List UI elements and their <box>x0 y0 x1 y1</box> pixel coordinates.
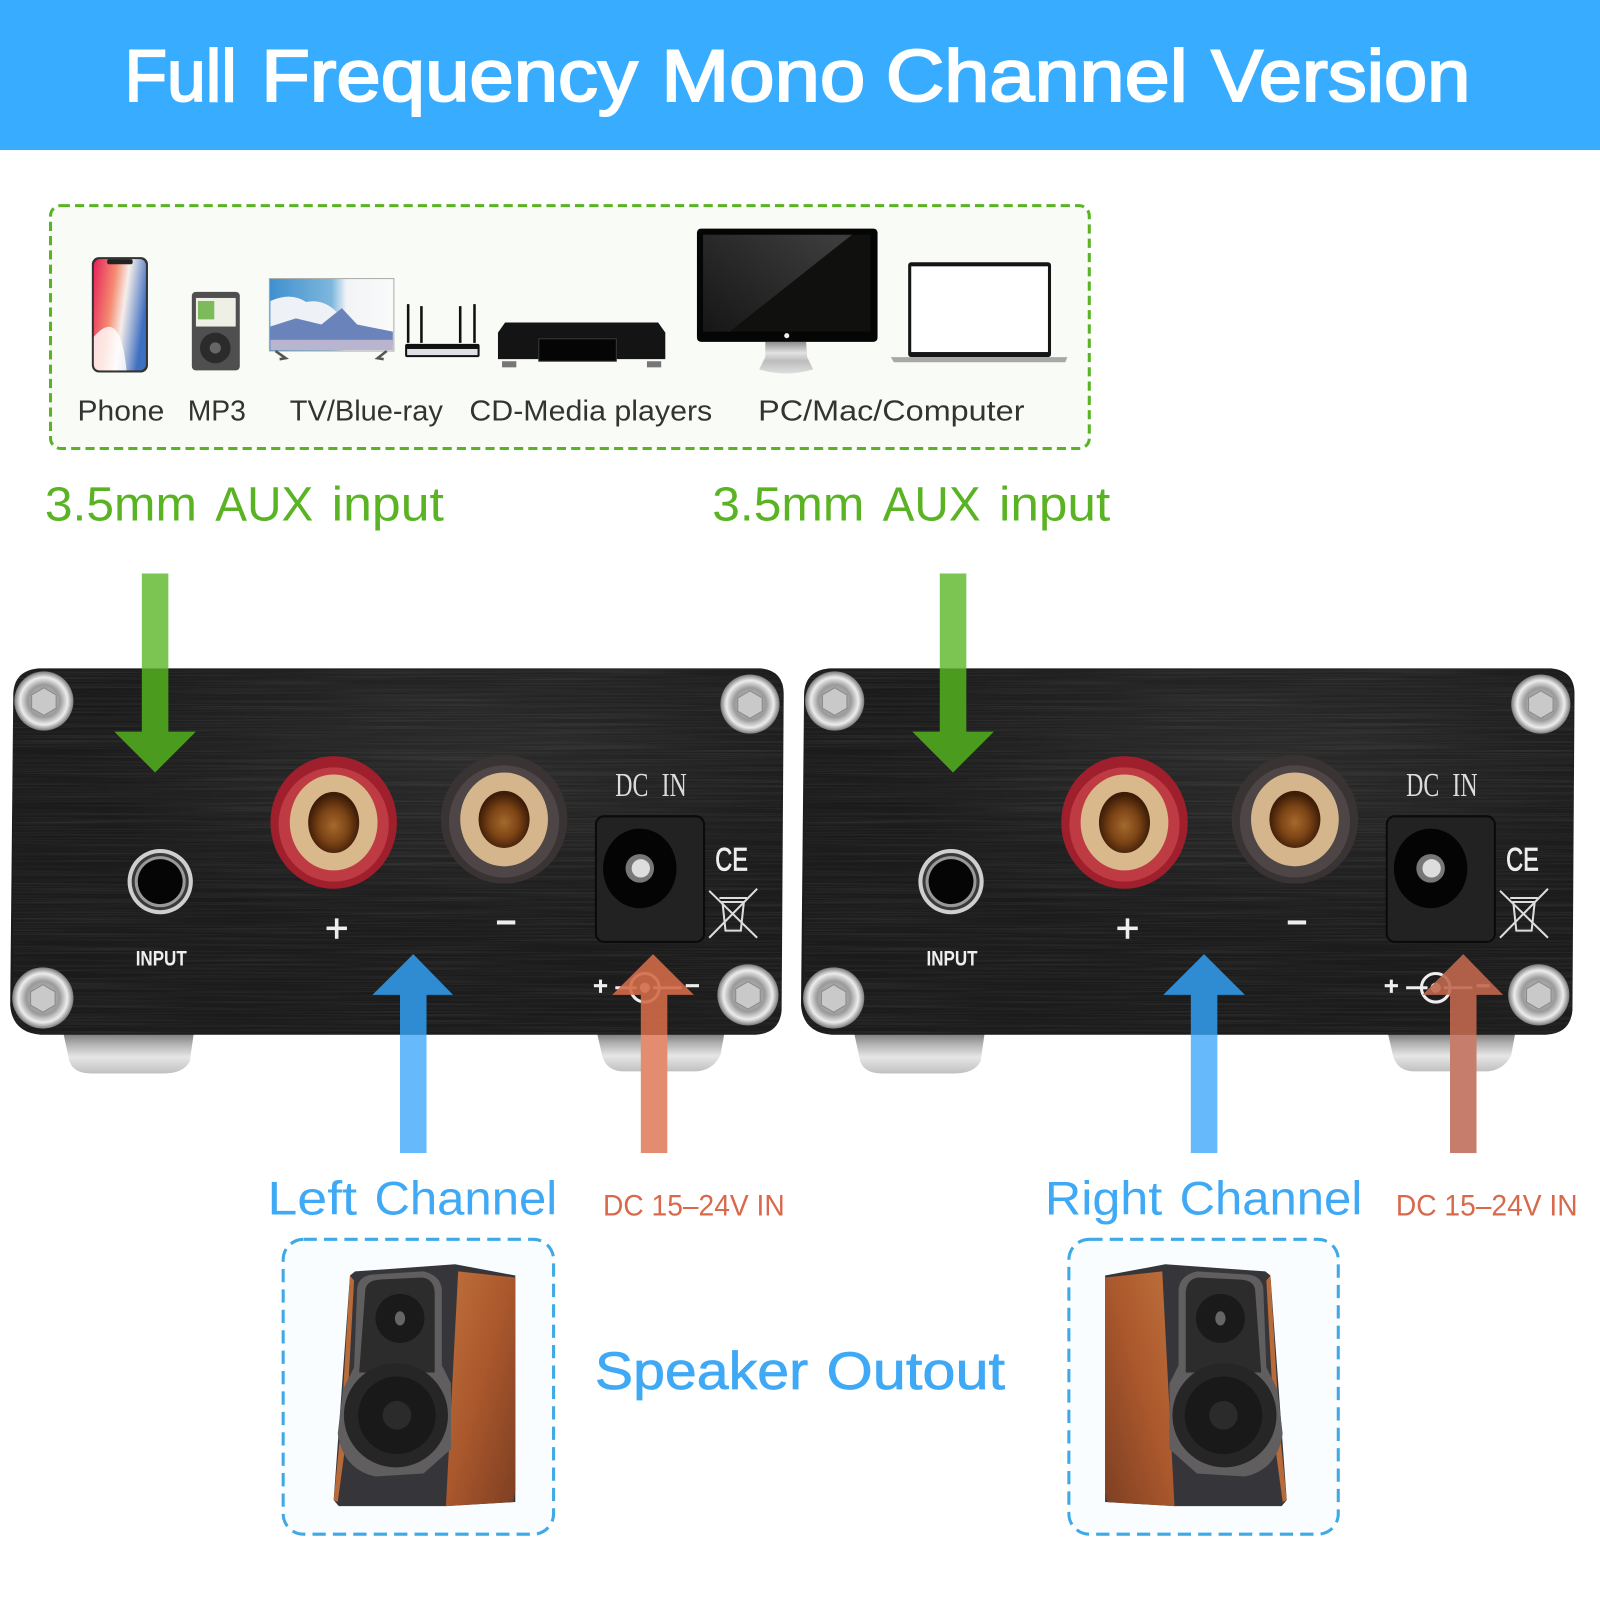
label: left channel <box>267 1172 557 1224</box>
title: Frequency <box>261 34 638 117</box>
DC power jack <box>596 816 704 942</box>
black binding post <box>441 755 567 884</box>
title: Full <box>124 34 237 117</box>
label: right channel <box>1045 1172 1362 1224</box>
input jack <box>918 849 984 914</box>
polarity marks <box>1117 918 1306 939</box>
arrow: green input <box>114 573 196 772</box>
speaker cabinet <box>334 1264 515 1506</box>
label: speaker output: Speaker <box>595 1342 808 1401</box>
arrow: red right DC power <box>1422 954 1503 1153</box>
DC power jack <box>1387 816 1495 942</box>
icon: TV <box>269 279 394 359</box>
DC polarity symbol <box>1385 973 1490 1002</box>
label: right AUX input: AUX <box>883 478 981 531</box>
label: speaker output: Outout <box>827 1342 1005 1401</box>
CE mark: CE <box>1506 840 1539 877</box>
label: left AUX input: 3.5mm <box>45 478 197 531</box>
polarity marks <box>327 918 515 939</box>
red binding post <box>1061 756 1188 889</box>
panel: left speaker <box>283 1239 554 1534</box>
CE mark: CE <box>715 840 748 877</box>
header banner <box>0 0 1600 150</box>
label: left AUX input: AUX <box>215 478 313 531</box>
device labels: Phone <box>78 395 164 427</box>
label: left channel: Channel <box>374 1172 557 1224</box>
icon: WEEE bin <box>1500 889 1548 938</box>
speaker graphic <box>1105 1264 1287 1506</box>
black binding post <box>1232 755 1358 884</box>
DC IN label: DC IN <box>615 767 687 804</box>
woofer <box>344 1363 448 1467</box>
speaker baffle <box>338 1271 451 1477</box>
label: right channel: Right <box>1045 1172 1162 1224</box>
arrow: red DC power <box>612 954 694 1153</box>
tweeter <box>359 1278 435 1372</box>
panel: right amplifier rear <box>801 668 1574 1073</box>
amplifier body <box>10 668 784 1035</box>
title: Channel <box>886 34 1188 117</box>
title <box>124 34 1470 117</box>
arrow: blue left channel <box>372 954 453 1153</box>
input label: INPUT <box>136 946 187 970</box>
input label: INPUT <box>927 946 978 970</box>
DC IN label: DC IN <box>1406 767 1478 804</box>
icon: WEEE bin <box>709 889 757 938</box>
panel: right speaker <box>1069 1239 1338 1534</box>
arrow: green right input <box>912 573 994 772</box>
amplifier body <box>801 668 1574 1035</box>
device labels: CD-Media players <box>469 395 712 427</box>
label: right AUX input <box>712 478 1110 531</box>
icon: laptop <box>891 262 1067 362</box>
icon: router <box>405 304 480 357</box>
label: left AUX input <box>45 478 444 531</box>
device labels <box>78 395 1025 427</box>
label: left channel: Left <box>267 1172 357 1224</box>
feet <box>63 1033 724 1073</box>
red binding post <box>270 756 397 889</box>
panel: left amplifier rear <box>10 573 784 1153</box>
DC polarity symbol <box>594 973 699 1002</box>
label: left DC voltage: DC 15–24V IN <box>603 1189 785 1222</box>
title: Mono <box>661 34 865 117</box>
label: right AUX input: 3.5mm <box>712 478 864 531</box>
screws <box>803 671 1570 1029</box>
input jack <box>128 849 193 914</box>
label: right DC voltage: DC 15–24V IN <box>1396 1189 1578 1222</box>
icon: CD media player <box>498 322 665 367</box>
device labels: TV/Blue-ray <box>290 395 444 427</box>
label: speaker output <box>595 1342 1005 1401</box>
title: Version <box>1211 34 1470 117</box>
arrow: blue right channel <box>1163 954 1245 1153</box>
panel: input source devices <box>51 206 1089 448</box>
device labels: MP3 <box>188 395 246 427</box>
icon: desktop monitor <box>697 229 878 373</box>
device labels: PC/Mac/Computer <box>758 395 1025 427</box>
icon: phone <box>92 257 148 372</box>
label: left AUX input: input <box>332 478 444 531</box>
label: right channel: Channel <box>1180 1172 1362 1224</box>
icon: MP3 player <box>192 292 240 370</box>
feet <box>854 1033 1515 1073</box>
screws <box>12 671 780 1029</box>
label: right AUX input: input <box>999 478 1110 531</box>
